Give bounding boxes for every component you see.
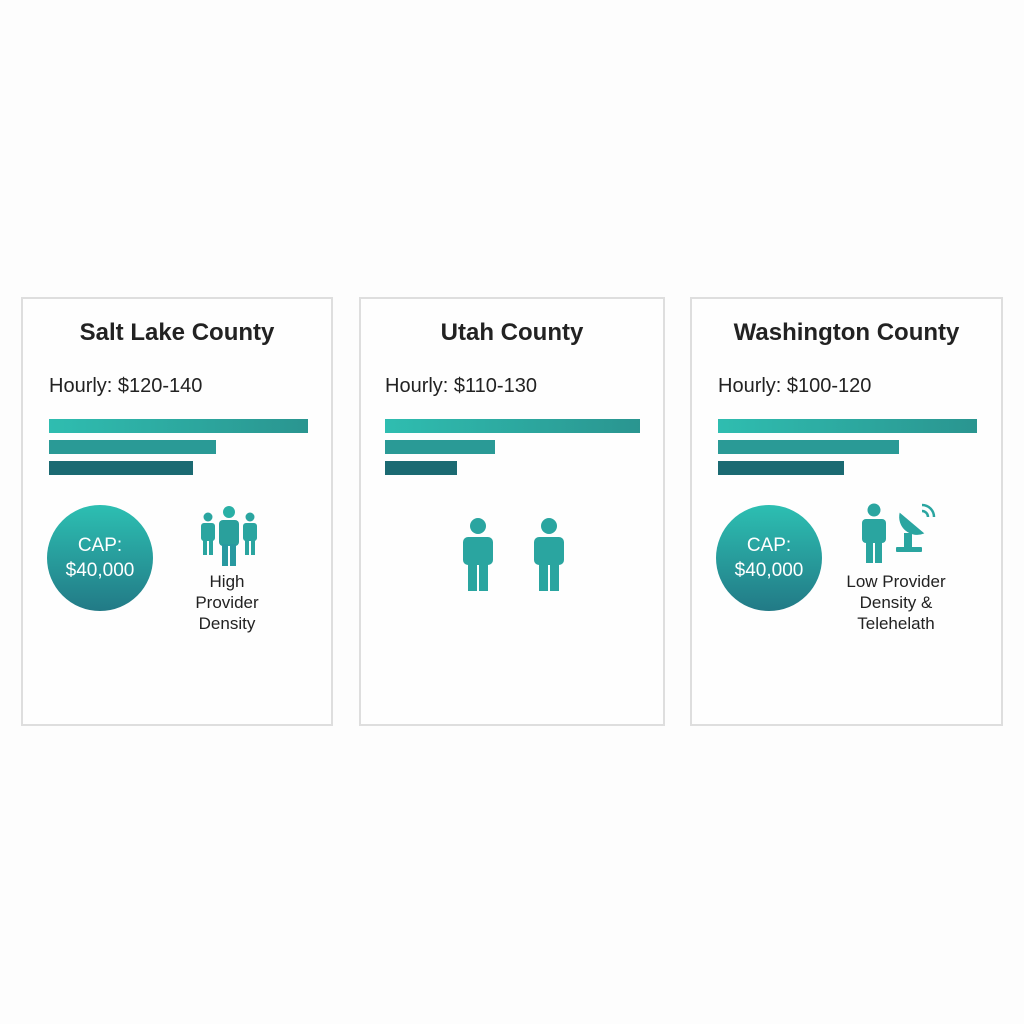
hourly rate: Hourly: $120-140 [49, 375, 202, 397]
label: high provider density: Provider [195, 593, 259, 612]
panel: Washington County [690, 297, 1003, 726]
label: high provider density: Density [199, 614, 255, 633]
bar chart [718, 419, 977, 475]
bar chart [49, 419, 308, 475]
cap circle: CAP: [78, 535, 122, 556]
label: low provider density & telehealth: Density & [860, 593, 932, 612]
label: high provider density: High [210, 572, 244, 591]
label: low provider density & telehealth [846, 572, 946, 633]
cap circle: $40,000 [66, 560, 134, 581]
icon: group of people [201, 506, 257, 566]
title: Washington County [734, 319, 959, 346]
hourly rate: Hourly: $110-130 [385, 375, 537, 397]
panel: Utah County [359, 297, 665, 726]
cap circle: $40,000 [735, 560, 803, 581]
panel: Salt Lake County [21, 297, 333, 726]
hourly rate: Hourly: $100-120 [718, 375, 871, 397]
cap circle: CAP: [747, 535, 791, 556]
icon: two persons [463, 518, 564, 591]
label: low provider density & telehealth: Low Provider [846, 572, 946, 591]
label: low provider density & telehealth: Telehelath [857, 614, 935, 633]
title: Utah County [441, 319, 583, 346]
label: high provider density [195, 572, 259, 633]
bar chart [385, 419, 640, 475]
title: Salt Lake County [80, 319, 274, 346]
cap circle [716, 505, 822, 611]
icon: person and satellite dish [862, 504, 936, 563]
cap circle [47, 505, 153, 611]
